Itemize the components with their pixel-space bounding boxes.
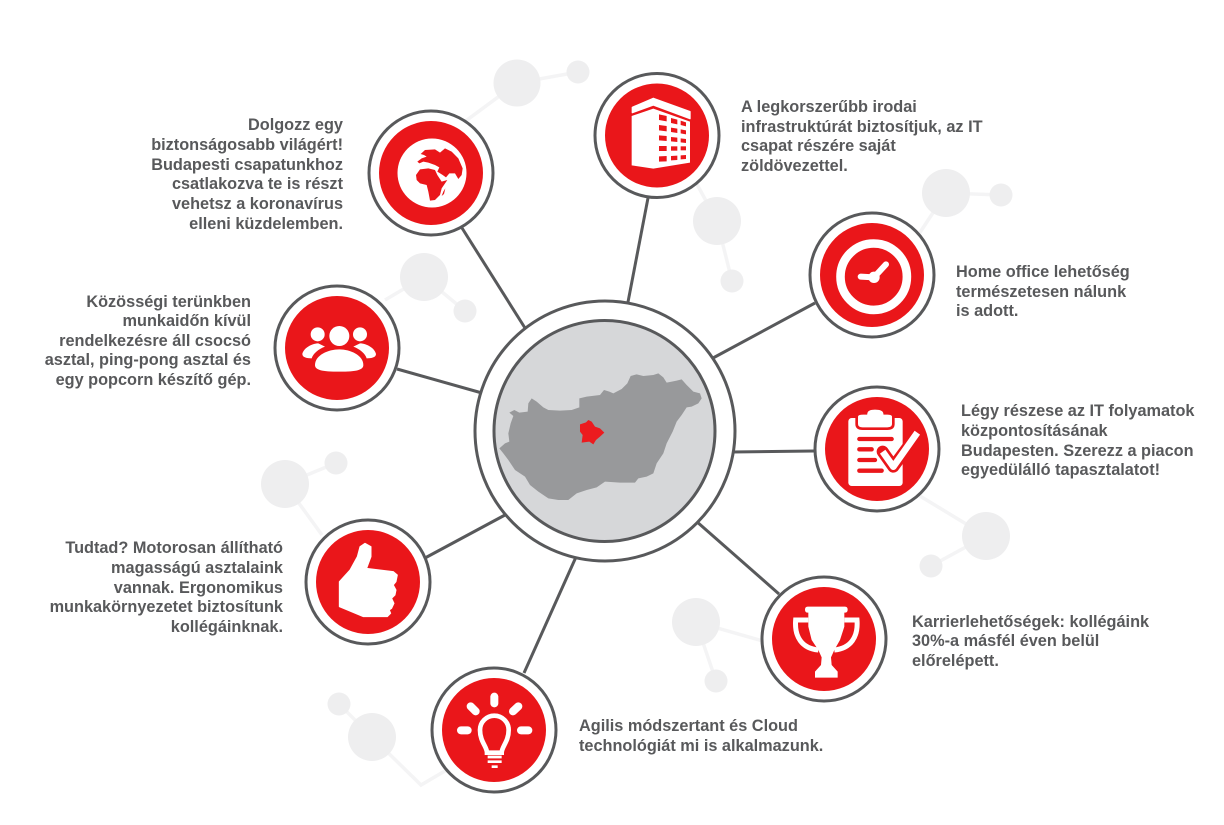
- text: community: [45, 293, 251, 389]
- node: globe: [369, 111, 493, 235]
- text: career: 30%-a másfél éven belül: [912, 632, 1099, 650]
- text: IT processes: [961, 402, 1195, 479]
- node: trophy: [762, 577, 886, 701]
- text: agile: Agilis módszertant és Cloud: [579, 717, 798, 735]
- text: ergonomics: kollégáinknak.: [171, 618, 283, 636]
- text: office: A legkorszerűbb irodai: [741, 98, 917, 116]
- text: IT processes: Légy részese az IT folyamatok: [961, 402, 1195, 420]
- text: community: munkaidőn kívül: [123, 312, 251, 330]
- background molecule decorations: [261, 60, 1012, 785]
- text: career: [912, 613, 1150, 670]
- text: office: csapat részére saját: [741, 137, 896, 155]
- text: agile: technológiát mi is alkalmazunk.: [579, 737, 823, 755]
- text: community: egy popcorn készítő gép.: [56, 371, 251, 389]
- text: home office: Home office lehetőség: [956, 263, 1130, 281]
- text: IT processes: Budapesten. Szerezz a piacon: [961, 442, 1194, 460]
- connector lines: [397, 198, 815, 673]
- text: career: előrelépett.: [912, 652, 999, 670]
- node: thumbs up: [306, 520, 430, 644]
- text: community: asztal, ping-pong asztal és: [45, 351, 251, 369]
- text: home office: [956, 263, 1130, 320]
- text: ergonomics: vannak. Ergonomikus: [114, 579, 283, 597]
- text: security: Dolgozz egy: [248, 116, 343, 134]
- text: office: [741, 98, 983, 175]
- text: office: infrastruktúrát biztosítjuk, az IT: [741, 118, 983, 136]
- node: clock: [810, 213, 934, 337]
- text: home office: természetesen nálunk: [956, 283, 1127, 301]
- text: security: vehetsz a koronavírus: [172, 195, 343, 213]
- node: people: [275, 286, 399, 410]
- text: ergonomics: Tudtad? Motorosan állítható: [65, 539, 283, 557]
- text: community: rendelkezésre áll csocsó: [59, 332, 251, 350]
- text: community: Közösségi terünkben: [86, 293, 251, 311]
- node: office building: [595, 74, 719, 198]
- text: IT processes: egyedülálló tapasztalatot!: [961, 461, 1160, 479]
- text: career: Karrierlehetőségek: kollégáink: [912, 613, 1150, 631]
- text: office: zöldövezettel.: [741, 157, 848, 175]
- text: ergonomics: [50, 539, 284, 636]
- text: security: Budapesti csapatunkhoz: [151, 156, 343, 174]
- text: security: csatlakozva te is részt: [172, 175, 344, 193]
- text: ergonomics: magasságú asztalaink: [111, 559, 284, 577]
- text: home office: is adott.: [956, 302, 1018, 320]
- text: IT processes: központosításának: [961, 422, 1109, 440]
- central hub with map of Hungary: [475, 301, 735, 561]
- text: security: [151, 116, 344, 233]
- node: light bulb: [432, 668, 556, 792]
- map of Hungary: [499, 373, 702, 500]
- text: ergonomics: munkakörnyezetet biztosítunk: [50, 598, 284, 616]
- text: agile: [579, 717, 823, 755]
- text: security: biztonságosabb világért!: [151, 136, 343, 154]
- text: security: elleni küzdelemben.: [189, 215, 343, 233]
- node: clipboard: [815, 387, 939, 511]
